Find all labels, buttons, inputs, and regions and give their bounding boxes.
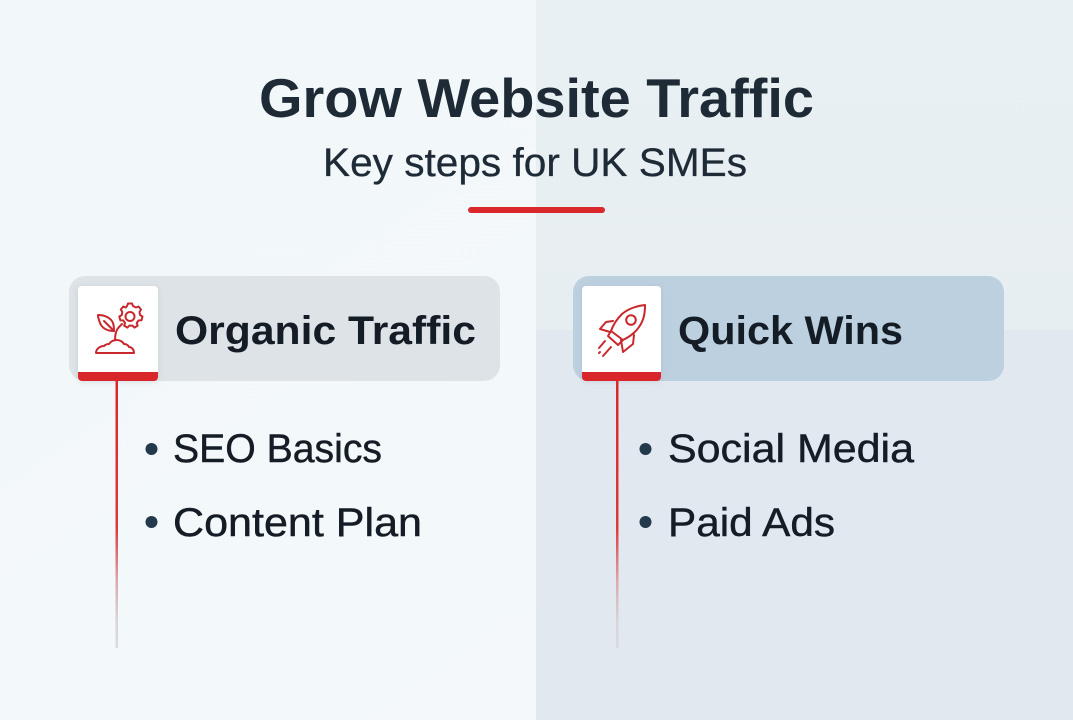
organic bullet: Content Plan: Content Plan [173,501,422,545]
quick wins bullet: Paid Ads: Paid Ads [668,501,835,545]
organic icon card [78,286,158,381]
organic bullet: SEO Basics: SEO Basics [173,427,382,471]
icon: plant with gear [96,304,142,353]
quick wins heading: Quick Wins [678,309,903,353]
panel: organic traffic [69,276,500,648]
title accent underline [468,207,605,213]
subtitle: Key steps for UK SMEs [323,141,747,185]
organic traffic header bar [69,276,500,381]
icon: rocket [599,305,645,356]
quick wins bullet: Social Media: Social Media [668,427,915,471]
organic heading: Organic Traffic [175,309,476,353]
quick wins header bar [573,276,1004,381]
quick wins icon card [582,286,661,381]
organic timeline line [116,381,118,648]
panel: quick wins [573,276,1004,648]
title: Grow Website Traffic [259,67,814,129]
quick wins timeline line [616,381,618,648]
